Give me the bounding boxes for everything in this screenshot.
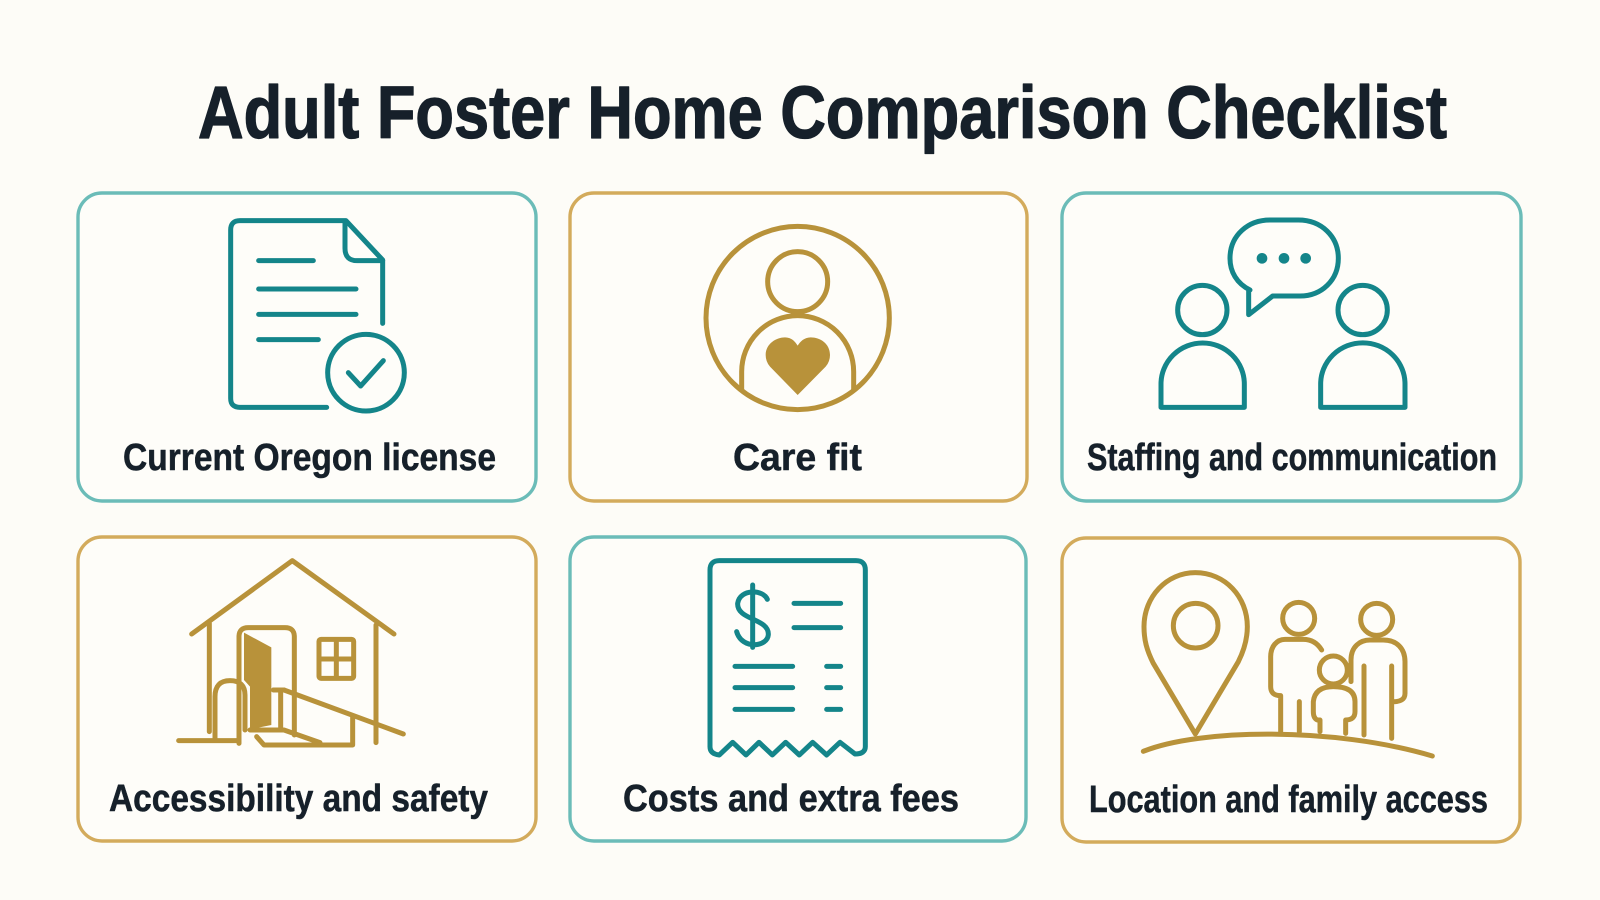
label: location and family access: Location and family access bbox=[1089, 779, 1488, 821]
card border bbox=[570, 193, 1027, 501]
panel: costs and extra fees bbox=[570, 537, 1026, 841]
card border bbox=[1062, 193, 1521, 501]
panel: care fit bbox=[570, 193, 1027, 501]
card border bbox=[78, 193, 536, 501]
card border bbox=[78, 537, 536, 841]
icon: receipt with dollar sign bbox=[710, 561, 865, 755]
panel: staffing and communication bbox=[1062, 193, 1521, 501]
label: costs and extra fees: Costs and extra fees bbox=[623, 778, 959, 820]
icon: two people with speech bubble bbox=[1161, 220, 1405, 407]
card border bbox=[1062, 538, 1520, 842]
label: accessibility and safety: Accessibility and safety bbox=[109, 778, 488, 820]
icon: location pin with family bbox=[1143, 573, 1432, 756]
panel: location and family access bbox=[1062, 538, 1520, 842]
card border bbox=[570, 537, 1026, 841]
panel: current Oregon license bbox=[78, 193, 536, 501]
icon: person with heart in a circle bbox=[706, 226, 889, 410]
label: care fit: Care fit bbox=[733, 437, 862, 479]
icon: house with open door and ramp bbox=[179, 561, 403, 745]
icon: document with check mark bbox=[231, 221, 404, 411]
label: staffing and communication: Staffing and communication bbox=[1087, 437, 1497, 479]
panel: accessibility and safety bbox=[78, 537, 536, 841]
label: current Oregon license: Current Oregon license bbox=[123, 437, 496, 479]
